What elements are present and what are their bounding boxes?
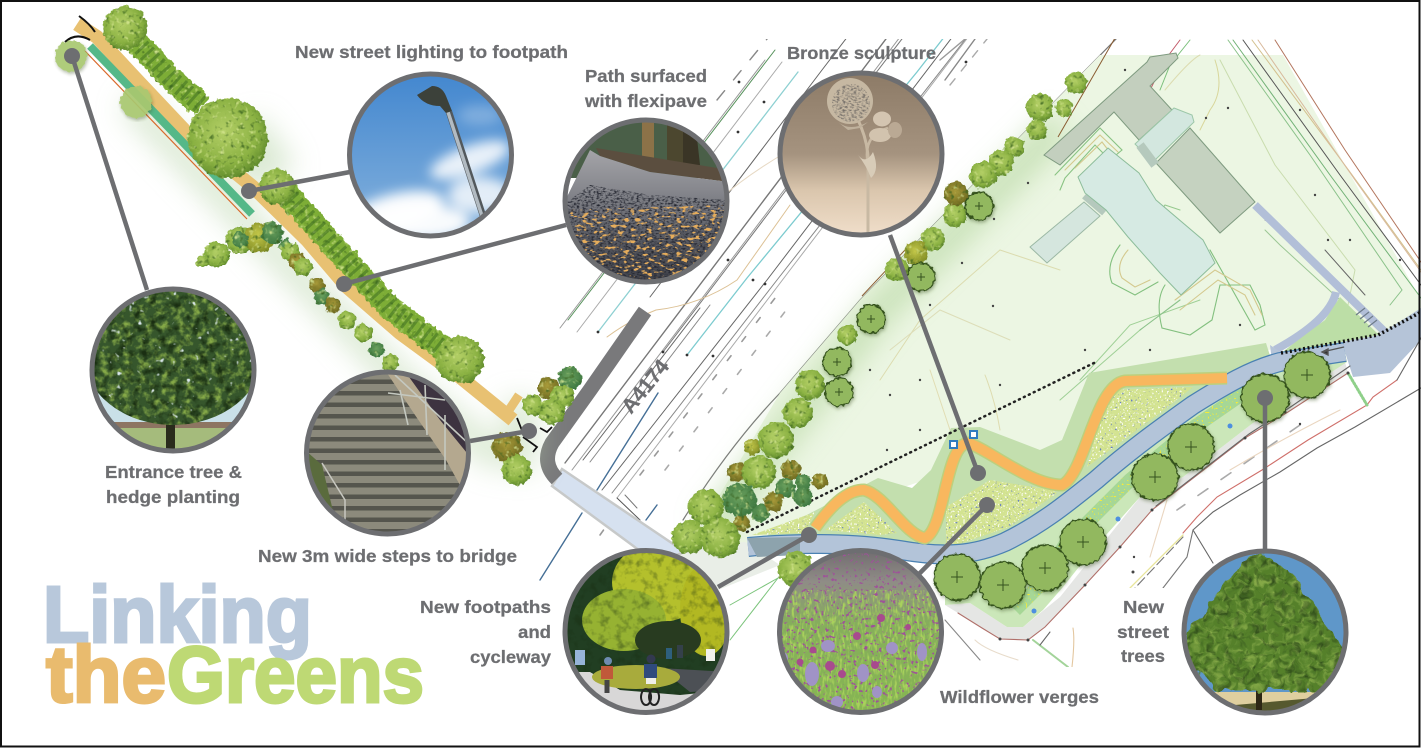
logo: Linking the Greens [43,570,424,719]
label: entrance tree [105,462,242,507]
building connector [1085,145,1155,212]
site plan: right hand site [540,15,1421,667]
grey path to bridge [548,311,645,479]
label: new footpaths and cycleway: New footpaths [420,597,551,617]
leader pins [64,48,1273,543]
hedge planting band [130,35,447,352]
label: path surfaced with flexipave: Path surfaced [585,66,707,86]
label: new street trees: New [1123,597,1164,617]
junction carriageway [1270,308,1421,377]
access road [1255,205,1385,332]
label: bronze sculpture: Bronze sculpture [787,43,936,63]
label: path surfaced with flexipave [584,66,707,111]
label: new street trees: street [1117,622,1169,642]
hedge strip orange edge [84,50,247,219]
logo: Linking the Greens: Greens [167,630,424,719]
shadow glow under north west strip [130,100,520,470]
meadow blue flecks [752,387,1193,545]
label: wildflower verges: Wildflower verges [940,687,1099,707]
dotted fence [747,362,1096,532]
photo: new street tree [1182,549,1349,716]
verge blue dots [1032,424,1232,614]
label: new steps: New 3m wide steps to bridge [258,546,517,566]
logo: Linking the Greens: Linking [43,570,312,659]
hedge strip teal [90,46,252,214]
building pale wing [1135,108,1194,162]
junction dotted kerb [1281,312,1421,353]
outlined street trees [823,192,1330,608]
footpath entrance kerb [65,16,95,42]
orange footpath [815,378,1227,538]
access road bend [1275,292,1336,350]
hedge stripes [130,35,447,352]
dark road start [747,537,800,557]
label: path surfaced with flexipave: with flexipave [584,91,707,111]
photo: flexipave path [563,118,729,290]
main cycleway road [748,352,1345,554]
trees north west strip [103,6,582,485]
grey footway [945,362,1348,640]
junction crossing stripes [1356,308,1377,327]
road alignment lines along A4174 [540,15,1117,640]
upper green band [745,343,1272,554]
pale grey margin near bridge [680,546,780,590]
building main pale block [1078,148,1215,295]
photo: steps [305,370,471,540]
leader lines [72,56,1265,587]
label: new street lighting: New street lighting to footpath [295,42,568,62]
photo: entrance tree [83,281,263,454]
building dark wing east [1156,128,1255,233]
tree line shading [710,125,1060,530]
building dark wing north [1044,53,1178,165]
photo: street light [342,73,514,242]
building contours [1055,128,1265,335]
label: new street trees: trees [1121,646,1165,666]
tree line brown edge [862,38,1115,296]
label: entrance tree: hedge planting [106,487,240,507]
tree crowns [823,192,1330,608]
label: new footpaths and cycleway: and [518,622,551,642]
logo: Linking the Greens: the [46,630,166,719]
photo: footpaths and cycleway [563,542,732,716]
label: new footpaths and cycleway: cycleway [470,647,551,667]
label: new footpaths and cycleway [420,597,551,667]
wildflower meadow patches [752,387,1193,545]
lawn survey points [869,69,1401,642]
junction arrow [1322,347,1344,355]
label: entrance tree: Entrance tree & [105,462,242,482]
highway edge lines lower right [945,338,1421,667]
photo: bronze sculpture [778,71,944,237]
lawn field [690,55,1421,550]
bridge deck [552,469,685,562]
meadow white flecks [752,387,1193,545]
label: new street trees [1117,597,1169,666]
verge inner stripe [1015,392,1245,610]
photo: wildflower verges [777,548,945,716]
lower green verge [945,352,1347,627]
entrance hedge trees [55,40,152,118]
tree centres [833,202,1313,591]
steps landing symbol [517,418,552,452]
road survey points [597,61,967,357]
north west footpath [77,24,513,420]
road label: A4174 [617,355,674,418]
junction planting triangle [1281,297,1379,353]
trees east tree line [672,72,1087,588]
site boundary contours [880,40,1421,430]
footpath stub [505,395,519,416]
sculpture markers [950,431,977,448]
verge yellow flecks [1015,392,1245,610]
building west arm [1030,202,1100,263]
